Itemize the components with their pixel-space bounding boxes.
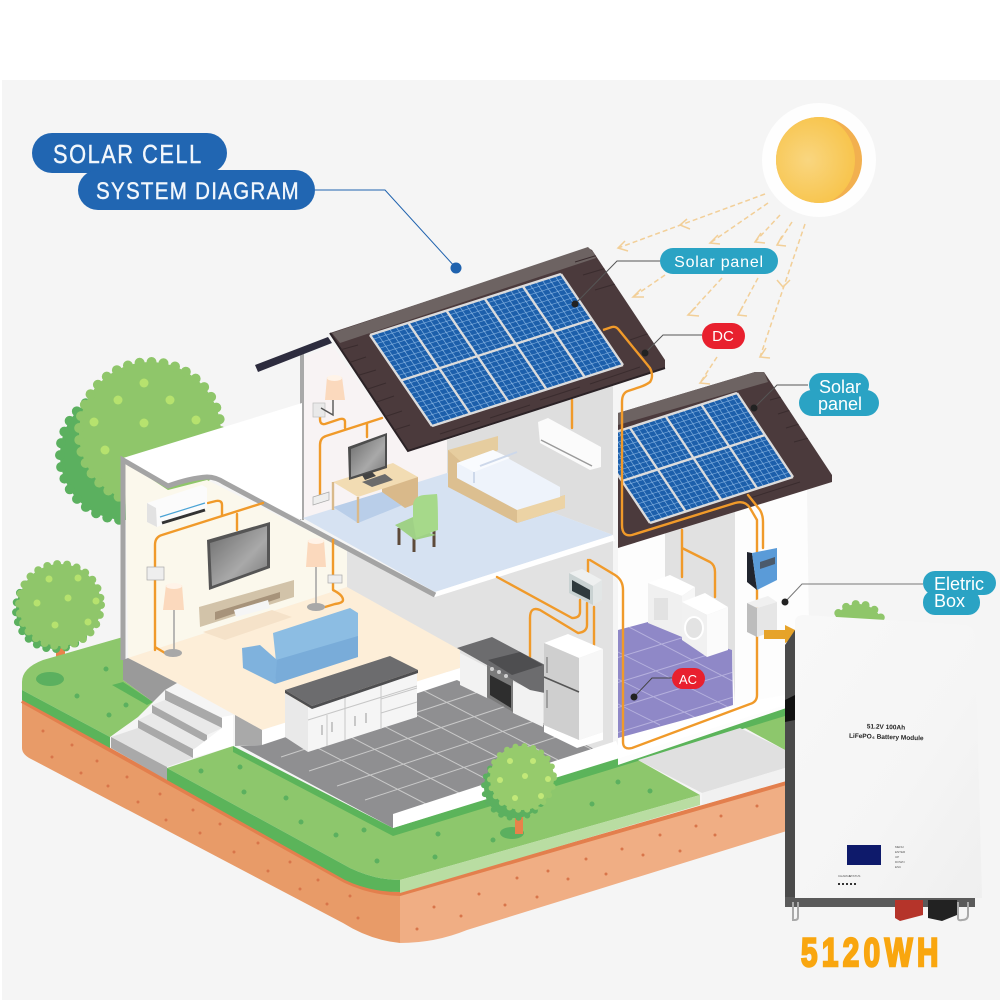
icon: kitchen island [285,656,418,752]
icon: switch and socket plates [147,567,342,583]
button labels: UP [895,855,899,859]
handles [792,902,968,920]
battery label [849,723,924,742]
icon: wall lamp upper [313,375,345,417]
title leader line [315,190,462,274]
icon: sun [761,103,876,217]
icon: blue sofa [242,608,358,684]
back wall [302,345,447,518]
icon: desk [333,463,418,523]
battery front [795,615,982,898]
icon: living room air conditioner [147,485,207,527]
cream wall [125,462,347,658]
callout: solar panel wing [750,373,879,416]
callout: DC: DC [712,328,734,345]
icon: bed [448,436,565,523]
icon: large tree [60,362,221,520]
button labels: STATUS [849,874,860,878]
capacity label: 5120WH [801,931,943,975]
soil right face [400,781,790,943]
button labels: ENTER [895,850,906,854]
main roof [330,247,665,451]
callout: electric box [782,571,996,615]
soil specks [43,731,757,929]
callout: AC: AC [679,672,697,687]
pill: solar cell [32,133,227,173]
grey outline [123,460,435,660]
status LEDs [838,883,858,885]
battery side [785,630,795,903]
right grey wall [447,385,613,535]
soil left face [22,695,400,943]
blue floor [303,473,613,592]
button labels: CHARGE [838,874,851,878]
callout: DC [642,323,745,356]
title pills [32,133,315,210]
icon: green chair [395,494,438,552]
icon: small left tree [16,564,101,682]
ground island [22,637,790,943]
icon: television [207,522,270,590]
icon: floor lamp right [306,538,326,611]
icon: TV stand [199,580,294,640]
sun ray arrows [618,194,805,384]
icon: floor lamp left [163,583,184,657]
icon: refrigerator [544,634,603,748]
button labels: DOWN [895,860,904,864]
callout: solar panel main [572,248,778,308]
wiring [155,382,763,748]
wall edge [300,352,304,520]
battery label: 51.2V 100Ah [867,723,905,732]
main solar panel array [370,274,623,426]
living room shell [123,403,460,745]
LCD display [847,845,881,865]
callout: solar panel main: Solar panel [674,254,764,271]
right wing white floor band [618,695,785,757]
icon: charge controller [747,548,777,590]
button labels [838,845,906,878]
battery label: LiFePO₄ Battery Module [849,733,924,742]
pill: system diagram [78,170,315,210]
upper floor room [302,345,615,599]
terminals [895,900,923,921]
button labels: ESC [895,865,902,869]
staircase [111,690,262,780]
purple floor [618,622,733,738]
icon: socket upper [313,492,329,505]
soil edge [22,701,790,894]
callout: electric box: Eletric [934,574,984,594]
walkway [638,728,785,805]
arrow to battery [764,625,803,643]
right wing solar panel array [594,393,793,523]
icon: computer monitor [348,433,393,487]
callout: AC [630,668,705,700]
callout: solar panel wing: panel [818,394,862,414]
pill: system diagram: SYSTEM DIAGRAM [96,177,300,204]
icon: washing machine [682,593,728,657]
foundation [123,658,177,702]
icon: distribution board [569,569,602,605]
button labels: MENU [895,845,904,849]
grass [22,637,153,737]
battery base strip [785,897,975,907]
icon: bedroom air conditioner [538,418,601,470]
callout: solar panel wing: Solar [819,377,861,397]
icon: tree behind battery [832,604,884,656]
white upper slab [123,403,302,520]
right wing house shell [618,512,785,765]
callout: electric box: Box [934,591,965,611]
right wing roof [618,372,832,548]
icon: kitchen counter and oven [457,637,545,727]
icon: small front tree [484,746,554,839]
icon: dryer [648,575,695,637]
peach floor [128,587,460,730]
ground floor back wall [347,541,613,750]
white curb [393,741,623,828]
icon: electric box [747,596,777,637]
battery module [785,615,982,921]
roof overhang [255,337,332,372]
grass tufts [77,669,650,861]
roof wire overlay [603,327,652,382]
pill: solar cell: SOLAR CELL [53,140,203,169]
kitchen floor [240,680,618,828]
